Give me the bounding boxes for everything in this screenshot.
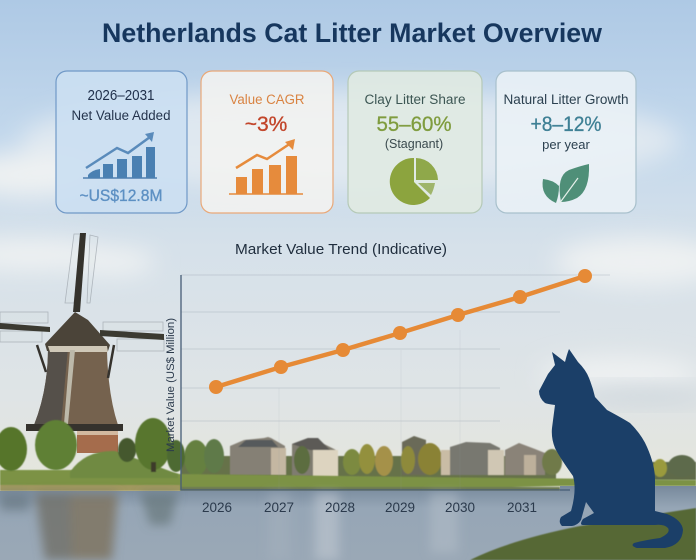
- chart grid: [181, 275, 610, 490]
- x-axis labels: 2029: [385, 500, 415, 515]
- x-axis labels: 2027: [264, 500, 294, 515]
- windmill sails: [73, 233, 86, 312]
- value: 55–60%: [376, 113, 452, 136]
- river bank: [0, 470, 696, 491]
- water: [0, 486, 696, 560]
- windmill gallery: [26, 424, 123, 431]
- windmill cap: [45, 312, 110, 351]
- heading: years: 2026–2031: [88, 88, 154, 104]
- town skyline: [181, 436, 696, 480]
- value: +8–12%: [530, 113, 602, 136]
- x-axis labels: 2030: [445, 500, 475, 515]
- grass foreground: [470, 508, 696, 560]
- windmill: [0, 233, 164, 453]
- panel: clay litter share: [348, 71, 482, 213]
- value: ~US$12.8M: [80, 187, 162, 205]
- chart axes: [181, 275, 570, 490]
- y-axis label: Market Value (US$ Million): [165, 318, 177, 452]
- trees: [0, 418, 185, 478]
- value: ~3%: [245, 113, 287, 136]
- water reflections: [0, 493, 458, 560]
- heading: clay litter share: Clay Litter Share: [364, 92, 466, 107]
- icon: growth bars orange: [229, 139, 303, 194]
- note: per year: per year: [542, 137, 591, 152]
- chart heading: Market Value Trend (Indicative): [235, 241, 447, 258]
- panel: value CAGR: [201, 71, 333, 213]
- windmill lattice sails: [0, 234, 164, 351]
- text: net value added: Net Value Added: [72, 108, 170, 123]
- heading: natural litter growth: Natural Litter Growth: [504, 92, 628, 107]
- panel: net value added: [56, 71, 187, 213]
- trend line: [216, 276, 585, 387]
- x-axis labels: 2026: [202, 500, 232, 515]
- note: stagnant: (Stagnant): [385, 137, 443, 151]
- windmill tower: [34, 348, 118, 425]
- icon: cat silhouette: [539, 349, 683, 548]
- x-axis labels: 2028: [325, 500, 355, 515]
- icon: pie chart: [390, 158, 438, 205]
- icon: growth bars blue: [83, 132, 157, 178]
- x-axis labels: [202, 500, 537, 515]
- icon: leaf: [543, 164, 589, 204]
- title: Netherlands Cat Litter Market Overview: [102, 18, 603, 48]
- panel: natural litter growth: [496, 71, 636, 213]
- data points: [209, 269, 592, 394]
- windmill base: [77, 428, 118, 453]
- line chart: [165, 269, 610, 515]
- heading: value CAGR: Value CAGR: [230, 92, 305, 107]
- x-axis labels: 2031: [507, 500, 537, 515]
